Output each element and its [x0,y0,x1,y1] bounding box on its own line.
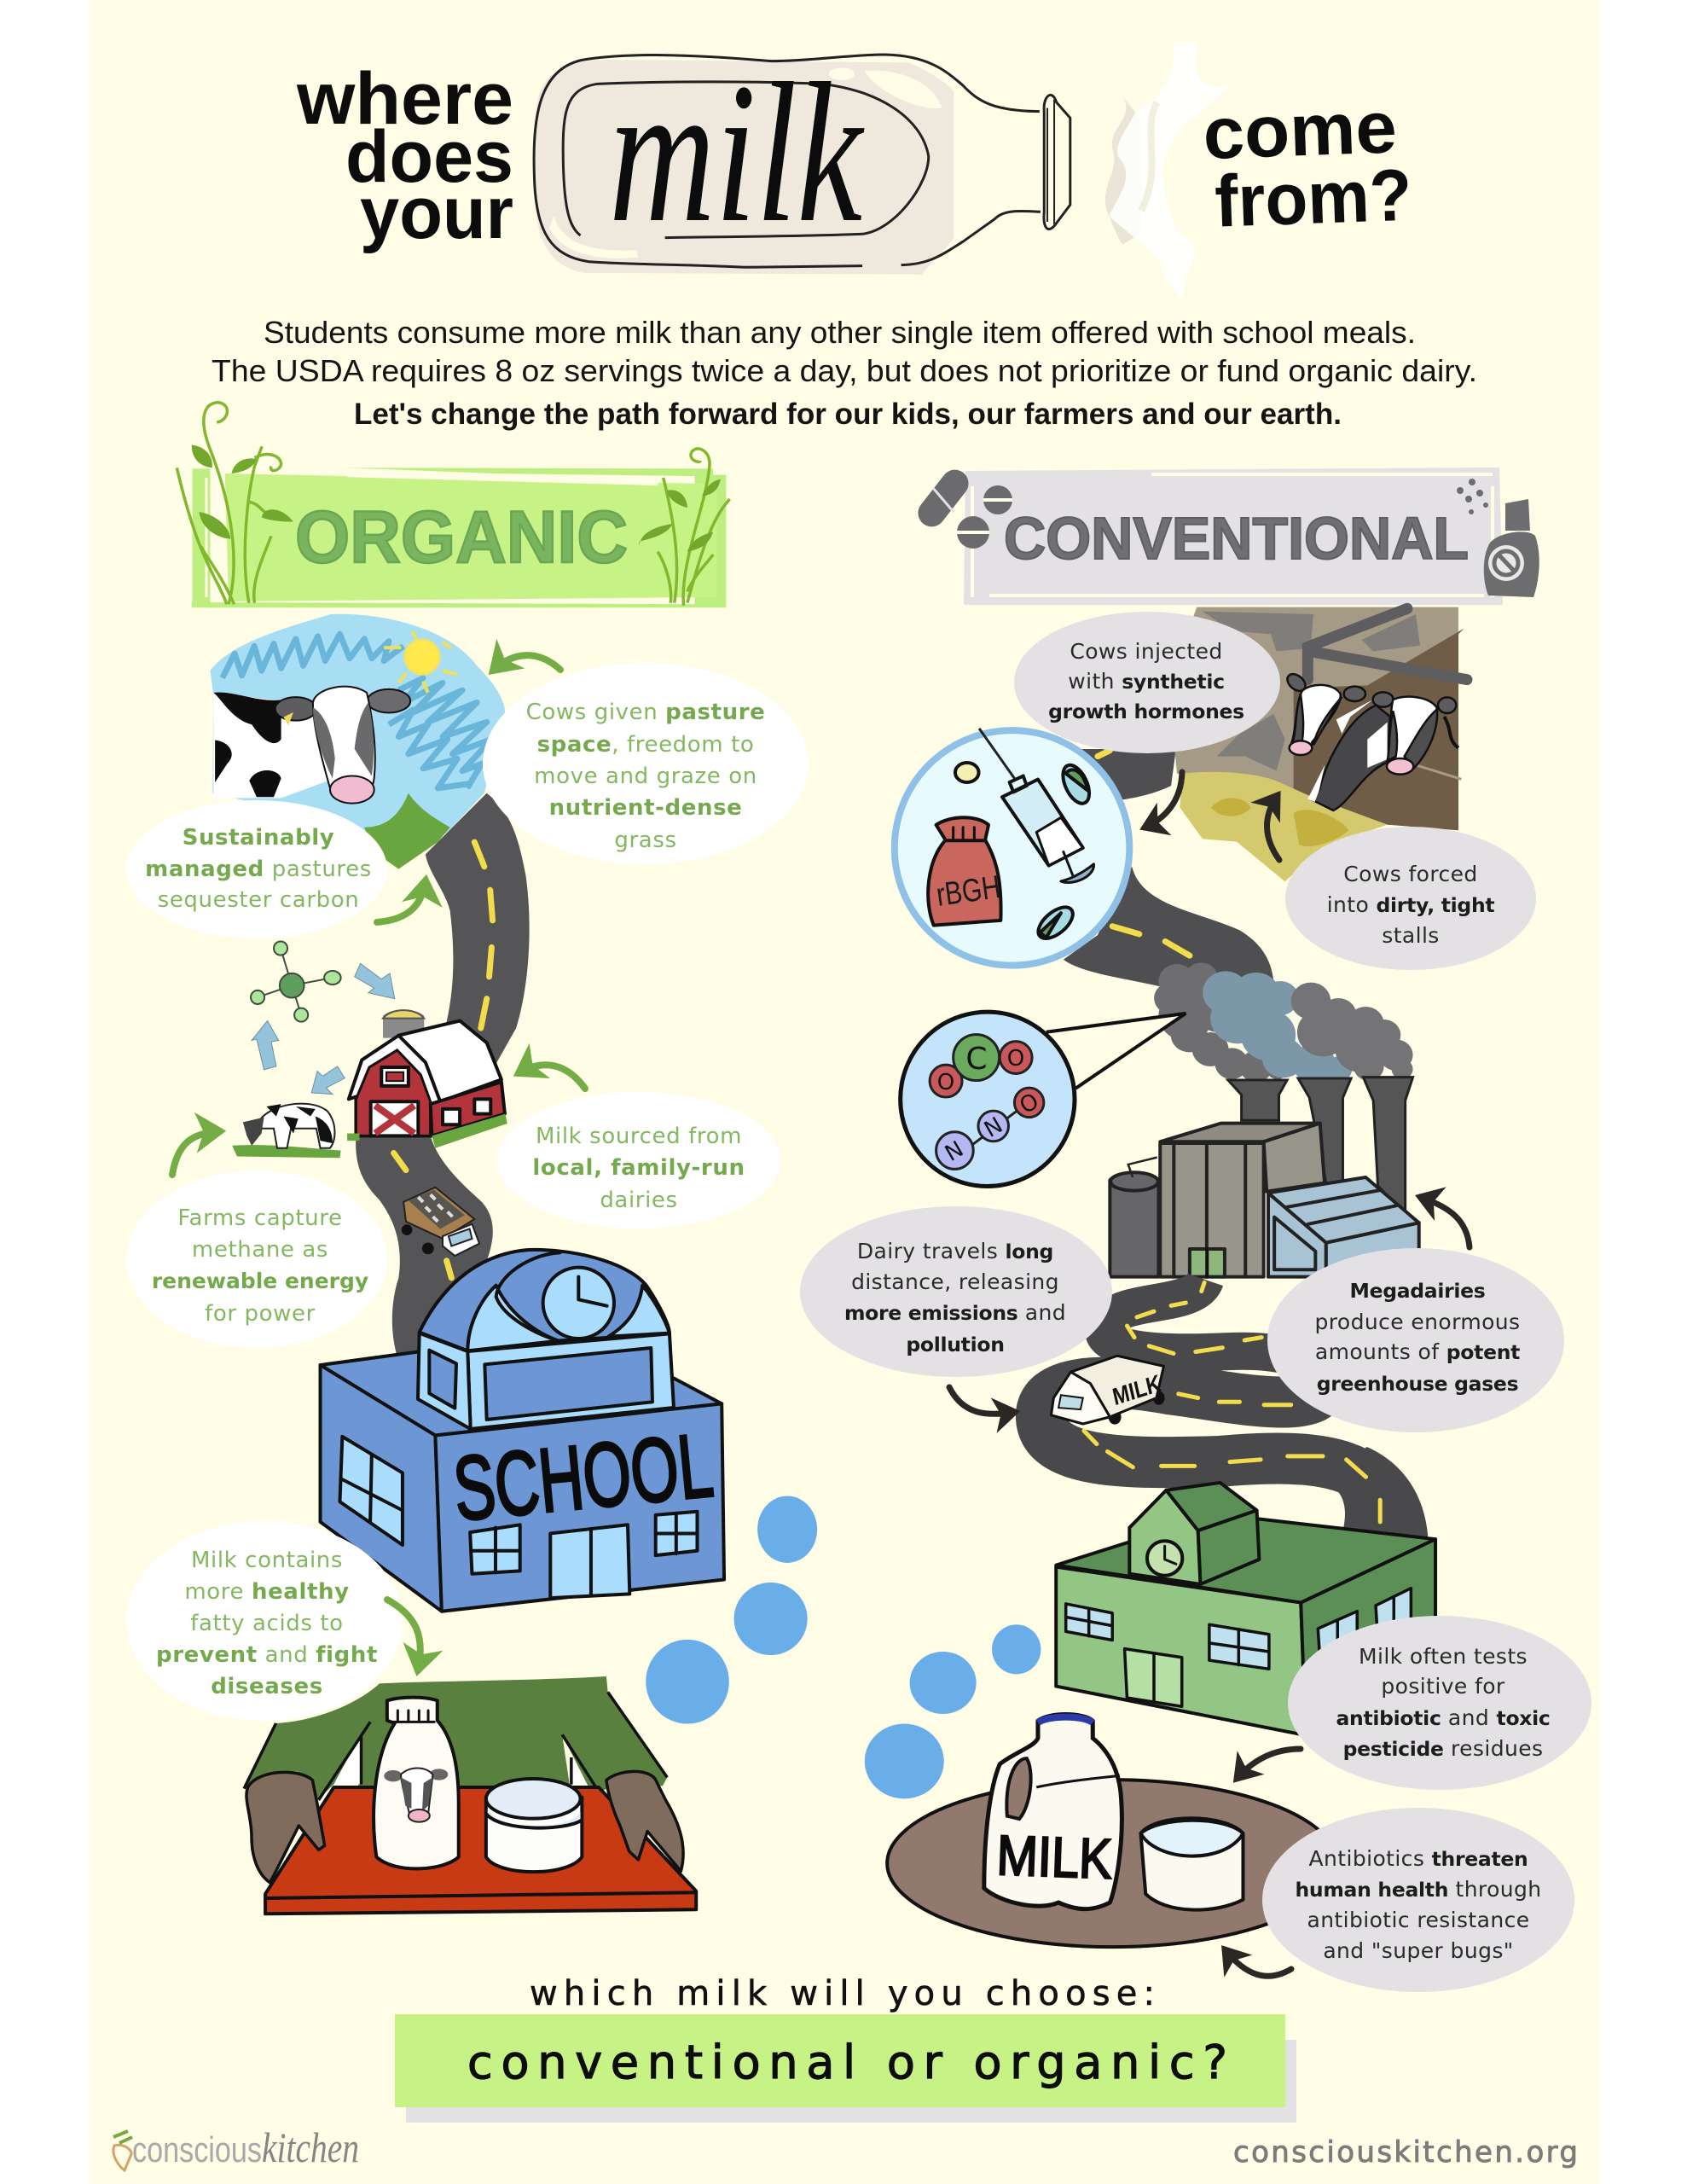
bubble: sequester carbon: Sustainably [183,825,334,851]
clock [543,1268,614,1339]
barn [347,1009,507,1148]
title words right: come [1202,86,1398,175]
bubble: super bugs: antibiotic resistance [1307,1908,1530,1932]
illustration: blue school [321,1250,724,1612]
bubble: megadairies: amounts of potent [1315,1339,1520,1364]
brown table [887,1780,1337,1947]
molecule letters: N [980,1112,1007,1143]
grazing cow [232,1104,341,1158]
bubble: renewable energy: renewable energy [152,1269,368,1293]
bubble: healthy fatty acids: more healthy [184,1579,350,1605]
bubble: megadairies: produce enormous [1315,1310,1520,1334]
bubble: dirty stalls [1267,795,1536,970]
bubble: super bugs: human health through [1295,1877,1542,1902]
banner label: ORGANIC [295,497,628,578]
milk bottle illustration [534,43,1228,299]
banner label: CONVENTIONAL [1004,505,1469,572]
front wall [1056,1567,1306,1735]
annex [1268,1177,1419,1277]
main building [1160,1124,1325,1277]
wordmark kitchen: kitchen [262,2123,359,2171]
bubble: dirty stalls: into dirty, tight [1327,892,1494,917]
molecule letters: N [941,1136,968,1167]
bubble: pasture space: space, freedom to [537,732,754,758]
answer text: conventional or organic? [467,2036,1227,2089]
rBGH label: rBGH [934,869,1003,914]
syringe [979,729,1093,882]
intro text: Students consume more milk than any other single item offered with school meals. [264,315,1416,350]
yogurt cup [1141,1818,1243,1910]
bubble: renewable energy: Farms capture [177,1205,343,1231]
intro text [212,315,1477,431]
grass [364,793,450,869]
grey scribbles [1203,612,1420,770]
title words right [1202,86,1413,243]
bubble: healthy fatty acids: Milk contains [191,1548,343,1573]
bubble: sequester carbon: managed pastures [145,857,372,882]
answer bar [395,2014,1285,2107]
bubble: megadairies: greenhouse gases [1317,1372,1518,1396]
word SCHOOL on building: SCHOOL [449,1414,717,1540]
hands [246,1772,325,1883]
bubble: antibiotic residues: pesticide residues [1343,1736,1543,1761]
illustration: methane cycle with barn [232,942,507,1256]
logo: conscious kitchen [113,2123,359,2171]
illustration: factory with emissions [1110,962,1419,1277]
molecule letters: O [1016,1089,1043,1119]
answer bar shadow [406,2040,1296,2123]
organic banner [177,403,730,607]
hay [1180,772,1388,881]
bubble: healthy fatty acids: diseases [211,1674,323,1699]
molecule letters: O [1007,1046,1024,1072]
illustration: hormones circle [895,729,1129,966]
bubble: pasture space: nutrient-dense [549,795,742,821]
cows [1284,671,1458,810]
banner background [964,468,1503,605]
bubble: local dairies: local, family-run [532,1155,745,1181]
tank [1110,1158,1158,1277]
bubble: pasture space: grass [614,828,677,853]
bubble: pasture space [483,655,809,864]
bubble: antibiotic residues: antibiotic and toxic [1336,1705,1551,1730]
milk truck [1051,1356,1165,1425]
roof and walls [321,1351,724,1612]
bubble: healthy fatty acids: fatty acids to [190,1611,344,1636]
bubble: long distance [800,1206,1112,1414]
bubble: healthy fatty acids: prevent and fight [156,1642,378,1668]
arrow [1237,1749,1301,1779]
bubble: long distance: Dairy travels long [857,1239,1053,1263]
bubble: long distance: pollution [906,1333,1005,1356]
arrow [1145,772,1182,828]
milk bottle with cow [374,1698,459,1868]
bubble: antibiotic residues [1237,1616,1591,1790]
stall bars [1307,608,1467,680]
molecule letters: C [965,1042,988,1077]
bubble: megadairies [1267,1197,1564,1432]
title word where: where [296,58,513,140]
thought bubbles [865,1624,1041,1798]
word milk in script: milk [609,42,865,264]
delivery truck with crates [402,1188,479,1256]
arrow [172,1131,220,1175]
bubble: healthy fatty acids [126,1521,420,1721]
cupola [418,1250,674,1429]
shirt gap [333,1734,587,1785]
bubble: super bugs: and "super bugs" [1323,1938,1514,1963]
side wall [1301,1539,1435,1735]
bubble: antibiotic residues: Milk often tests [1359,1644,1528,1669]
sun [384,631,457,693]
bubble: super bugs: Antibiotics threaten [1309,1846,1528,1871]
windows and door [1066,1589,1411,1706]
organic path: road [356,793,530,1380]
intro text: The USDA requires 8 oz servings twice a day, but does not prioritize or fund organic dairy. [212,353,1477,388]
cow [213,687,410,804]
bubble: renewable energy: for power [205,1301,316,1327]
illustration: conventional lunch [865,1624,1337,1947]
bubble: antibiotic residues: positive for [1381,1674,1505,1699]
illustration: organic lunch tray [244,1676,696,1914]
arrow [519,1065,585,1089]
illustration: conventional stall [1064,607,1467,989]
question line: which milk will you choose: [530,1974,1155,2013]
title word your: your [360,172,513,254]
chimneys [1228,1077,1413,1214]
arrow [377,880,426,922]
roof [1056,1519,1435,1603]
title: where does your milk come from [296,42,1413,299]
road piece [1073,749,1176,800]
bubble: dirty stalls: stalls [1382,923,1440,948]
icon: plants [177,403,730,606]
conventional banner [913,464,1539,605]
blue scribbles [223,634,491,788]
road to factory [1064,867,1274,989]
cycle arrows [252,963,395,1095]
bubble: growth hormones: with synthetic [1068,669,1225,694]
student shirt [244,1676,667,1800]
emissions circle [901,1012,1186,1187]
bubble: growth hormones: growth hormones [1048,700,1244,723]
website url: consciouskitchen.org [1233,2135,1578,2169]
wordmark conscious: conscious [132,2129,262,2169]
thought bubbles [646,1496,817,1724]
arrow [1225,1949,1291,1976]
molecule letters: O [937,1070,954,1095]
rBGH bottle [928,817,1001,926]
arrow [1420,1197,1470,1247]
sky [210,614,505,867]
bubble: local dairies: Milk sourced from [536,1124,742,1149]
illustration: cow in pasture [210,614,505,869]
bubble: renewable energy [126,1131,387,1348]
smoke clouds [1154,962,1414,1083]
barn wall [1168,607,1458,830]
bubble: pasture space: move and graze on [534,764,757,789]
illustration: green school [1056,1483,1435,1735]
milk splash [1105,43,1228,299]
door [1190,1249,1225,1277]
red tray [265,1787,696,1914]
title word does: does [345,116,513,198]
bubble: growth hormones [1014,612,1280,828]
bubble: long distance: distance, releasing [851,1269,1059,1294]
milk truck: MILK [1110,1371,1163,1411]
title words right: from? [1214,154,1413,243]
icon: carrot [113,2131,132,2170]
molecule icon [251,942,341,1022]
arrow [949,1387,1015,1414]
bubble: dirty stalls: Cows forced [1343,862,1478,886]
arrow [493,655,560,671]
bubble: super bugs [1225,1808,1574,1992]
bubble: sequester carbon: sequester carbon [158,887,359,913]
icon: pesticide sprayer [1457,479,1539,597]
pills [955,761,1094,944]
yogurt cup [486,1779,582,1872]
clock tower [1129,1483,1259,1584]
icon: pills [913,464,1012,549]
arrow [387,1600,420,1670]
bubble: megadairies: Megadairies [1349,1279,1486,1303]
arrow [1267,795,1279,860]
word MILK on jug: MILK [996,1823,1113,1891]
winding road to school [1041,1280,1428,1545]
banner background [192,468,726,607]
bubble: local dairies [497,1065,780,1228]
bubble: renewable energy: methane as [192,1237,328,1263]
bubble: sequester carbon [126,800,426,938]
molecule letters [937,1042,1043,1167]
windows and door [339,1437,698,1598]
bubble: local dairies: dairies [600,1188,678,1213]
bubble: pasture space: Cows given pasture [526,700,765,725]
intro text: Let's change the path forward for our kids, our farmers and our earth. [354,398,1342,431]
closing question [395,1974,1296,2123]
bubble: long distance: more emissions and [844,1300,1066,1325]
bubble: growth hormones: Cows injected [1070,639,1223,664]
milk jug [984,1715,1122,1909]
